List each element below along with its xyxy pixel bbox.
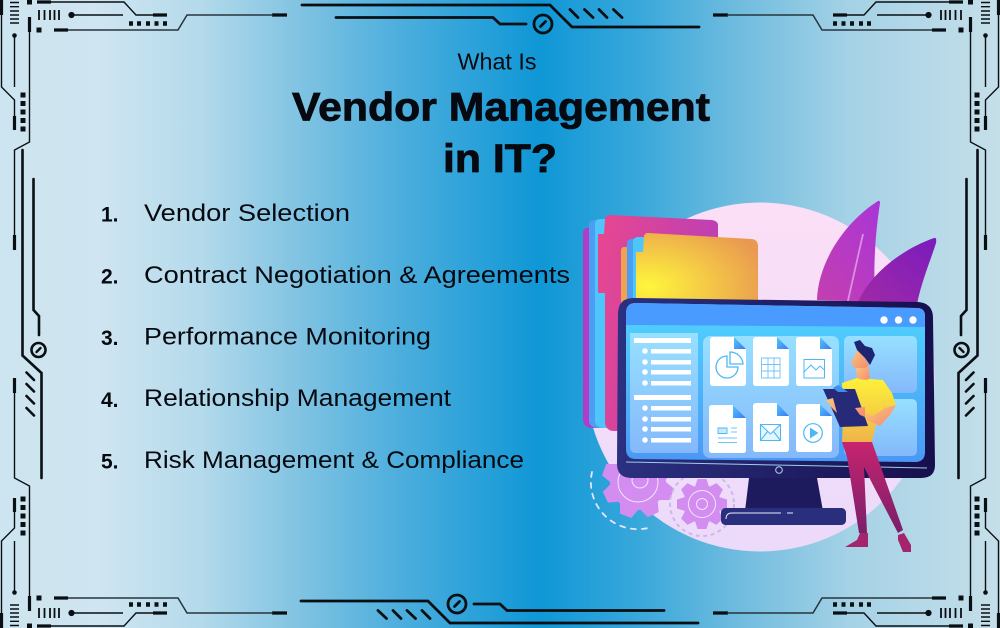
list item 3: Performance Monitoring bbox=[144, 324, 431, 350]
file: text document bbox=[709, 405, 746, 453]
numbered list bbox=[101, 200, 570, 474]
file: table bbox=[753, 337, 789, 386]
list item 3: 3. bbox=[101, 327, 119, 350]
list item 5: Risk Management & Compliance bbox=[144, 447, 524, 474]
list item 1: Vendor Selection bbox=[144, 200, 350, 227]
hands bbox=[826, 398, 865, 417]
circuit ornament: bottom centre bbox=[301, 595, 698, 623]
circuit ornament: top centre bbox=[302, 5, 699, 33]
list item 2: Contract Negotiation & Agreements bbox=[144, 262, 570, 289]
file grid panel bbox=[703, 336, 839, 458]
monitor screen bbox=[626, 303, 925, 462]
circuit ornament: top-left corner bbox=[2, 0, 287, 250]
title: Vendor Management bbox=[292, 86, 710, 130]
title: in IT? bbox=[443, 137, 557, 181]
file: pie chart bbox=[710, 337, 746, 386]
pink background circle bbox=[586, 202, 934, 552]
monitor lower bezel details bbox=[626, 462, 927, 473]
neck bbox=[856, 365, 870, 382]
legs bbox=[842, 442, 903, 533]
monitor stand bbox=[721, 478, 846, 525]
face bbox=[851, 350, 869, 368]
title bbox=[292, 48, 710, 181]
list item 5: 5. bbox=[101, 450, 119, 474]
file: play video bbox=[796, 404, 832, 452]
circuit ornament: left side bbox=[22, 150, 46, 478]
file: envelope bbox=[753, 403, 789, 452]
arm bbox=[865, 405, 896, 426]
list item 4: 4. bbox=[101, 389, 119, 412]
leaves bbox=[817, 201, 936, 305]
monitor frame bbox=[617, 298, 935, 478]
sidebar panel with list bbox=[630, 333, 698, 453]
file: image bbox=[796, 337, 832, 386]
shirt bbox=[842, 378, 896, 442]
title: What Is bbox=[458, 48, 536, 74]
list item 4: Relationship Management bbox=[144, 385, 451, 412]
circuit ornament: bottom-left corner bbox=[2, 378, 287, 628]
clipboard bbox=[823, 389, 868, 427]
icon: gears bbox=[591, 445, 734, 536]
right panel bottom bbox=[844, 399, 917, 456]
clipboard clip bbox=[833, 385, 848, 392]
window title bar bbox=[626, 303, 925, 327]
shoes bbox=[845, 533, 911, 552]
folder: pink stack bbox=[583, 215, 718, 431]
circuit ornament: bottom-right corner bbox=[713, 378, 998, 628]
circuit ornament: top-right corner bbox=[713, 0, 998, 250]
list item 1: 1. bbox=[101, 204, 119, 226]
illustration: monitor, folders and person bbox=[583, 201, 936, 552]
folder: yellow stack bbox=[621, 233, 758, 304]
list item 2: 2. bbox=[101, 266, 119, 288]
right panel top bbox=[844, 336, 917, 393]
person bbox=[823, 340, 911, 552]
hair bbox=[854, 340, 875, 365]
circuit ornament: right side bbox=[954, 150, 978, 478]
